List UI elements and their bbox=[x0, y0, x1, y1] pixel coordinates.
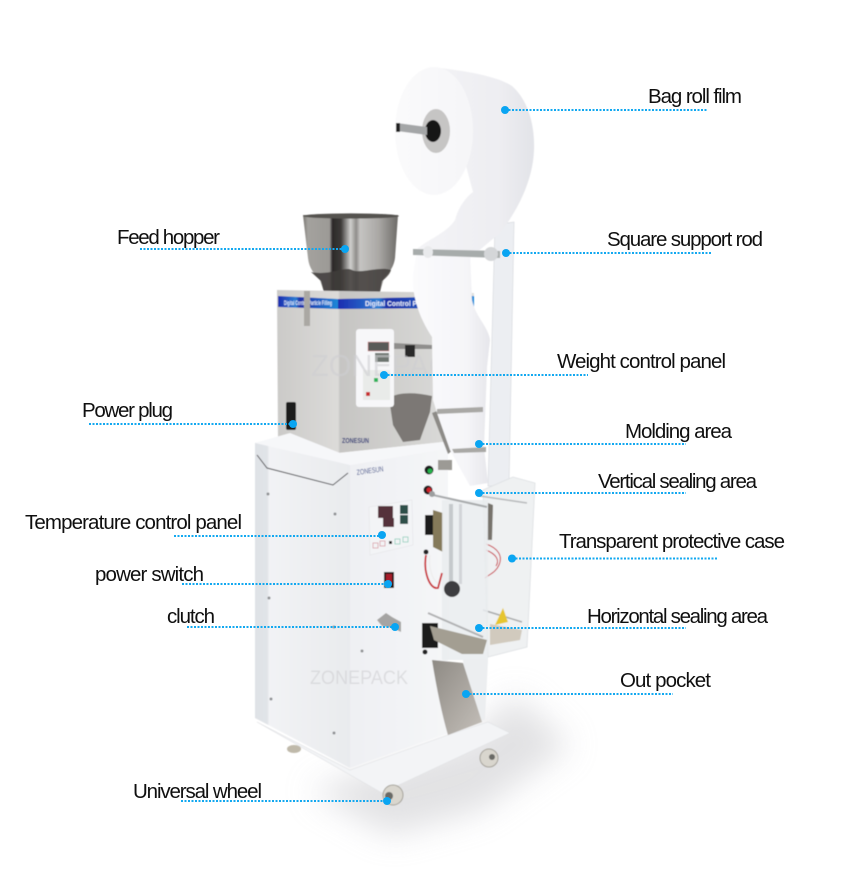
label: Square support rod bbox=[502, 228, 763, 257]
hopper bowl bbox=[303, 213, 399, 292]
label: Bag roll film bbox=[501, 85, 742, 114]
transparent protective case bbox=[480, 477, 535, 657]
weight control panel bbox=[356, 329, 394, 407]
label: Temperature control panel bbox=[25, 511, 386, 539]
vertical sealing mechanism bbox=[424, 491, 488, 660]
watermarks: ZONEPACK bbox=[311, 348, 469, 383]
watermarks bbox=[310, 348, 469, 689]
label: Molding area bbox=[475, 420, 733, 448]
power switch bbox=[384, 572, 394, 588]
label: Feed hopper: Feed hopper bbox=[117, 226, 220, 249]
clutch knob bbox=[377, 613, 401, 632]
cabinet body: ZONESUN bbox=[356, 464, 384, 477]
label: Out pocket: Out pocket bbox=[620, 669, 711, 692]
square rod bbox=[413, 246, 500, 261]
upper dosing box: Digital Control Partic bbox=[365, 299, 431, 308]
label: Bag roll film: Bag roll film bbox=[648, 85, 742, 108]
film bag bracket bbox=[432, 411, 453, 454]
label: Horizontal sealing area bbox=[475, 605, 769, 632]
film clamp bands bbox=[437, 407, 486, 453]
machine illustration bbox=[255, 67, 570, 835]
label: Molding area: Molding area bbox=[625, 420, 733, 443]
label: Horizontal sealing area: Horizontal sealing area bbox=[587, 605, 769, 628]
watermarks: ZONEPACK bbox=[310, 668, 408, 689]
indicator buttons bbox=[424, 460, 452, 494]
film strip bbox=[413, 250, 490, 486]
label: Out pocket bbox=[462, 669, 711, 698]
label: Feed hopper bbox=[117, 226, 349, 253]
label: Weight control panel: Weight control panel bbox=[557, 350, 726, 373]
support column bbox=[488, 222, 514, 486]
wheels bbox=[287, 745, 498, 805]
label: Vertical sealing area bbox=[475, 470, 758, 497]
label: Transparent protective case bbox=[508, 530, 785, 562]
label: power switch bbox=[95, 563, 392, 588]
floor shadow bbox=[310, 695, 570, 835]
temperature control panel bbox=[369, 500, 413, 555]
label: Vertical sealing area: Vertical sealing area bbox=[598, 470, 758, 493]
label: Weight control panel bbox=[380, 350, 726, 379]
label: clutch bbox=[167, 605, 399, 631]
label: Power plug bbox=[82, 399, 297, 428]
out pocket bbox=[432, 660, 488, 735]
horizontal sealing mechanism bbox=[422, 613, 487, 654]
label: Universal wheel bbox=[133, 780, 391, 805]
label: Power plug: Power plug bbox=[82, 399, 173, 422]
label: Universal wheel: Universal wheel bbox=[133, 780, 262, 803]
label: Temperature control panel: Temperature control panel bbox=[25, 511, 242, 534]
upper dosing box: ZONESUN bbox=[342, 436, 369, 445]
label: power switch: power switch bbox=[95, 563, 204, 586]
label: Square support rod: Square support rod bbox=[607, 228, 763, 251]
label: clutch: clutch bbox=[167, 605, 215, 628]
base plate bbox=[257, 722, 510, 793]
label: Transparent protective case: Transparent protective case bbox=[559, 530, 785, 553]
cabinet body bbox=[255, 433, 448, 768]
funnel bbox=[389, 393, 432, 442]
upper dosing box bbox=[277, 290, 474, 453]
upper dosing box: Digital Control Particle Filling bbox=[284, 301, 332, 307]
film roll bbox=[395, 67, 534, 258]
